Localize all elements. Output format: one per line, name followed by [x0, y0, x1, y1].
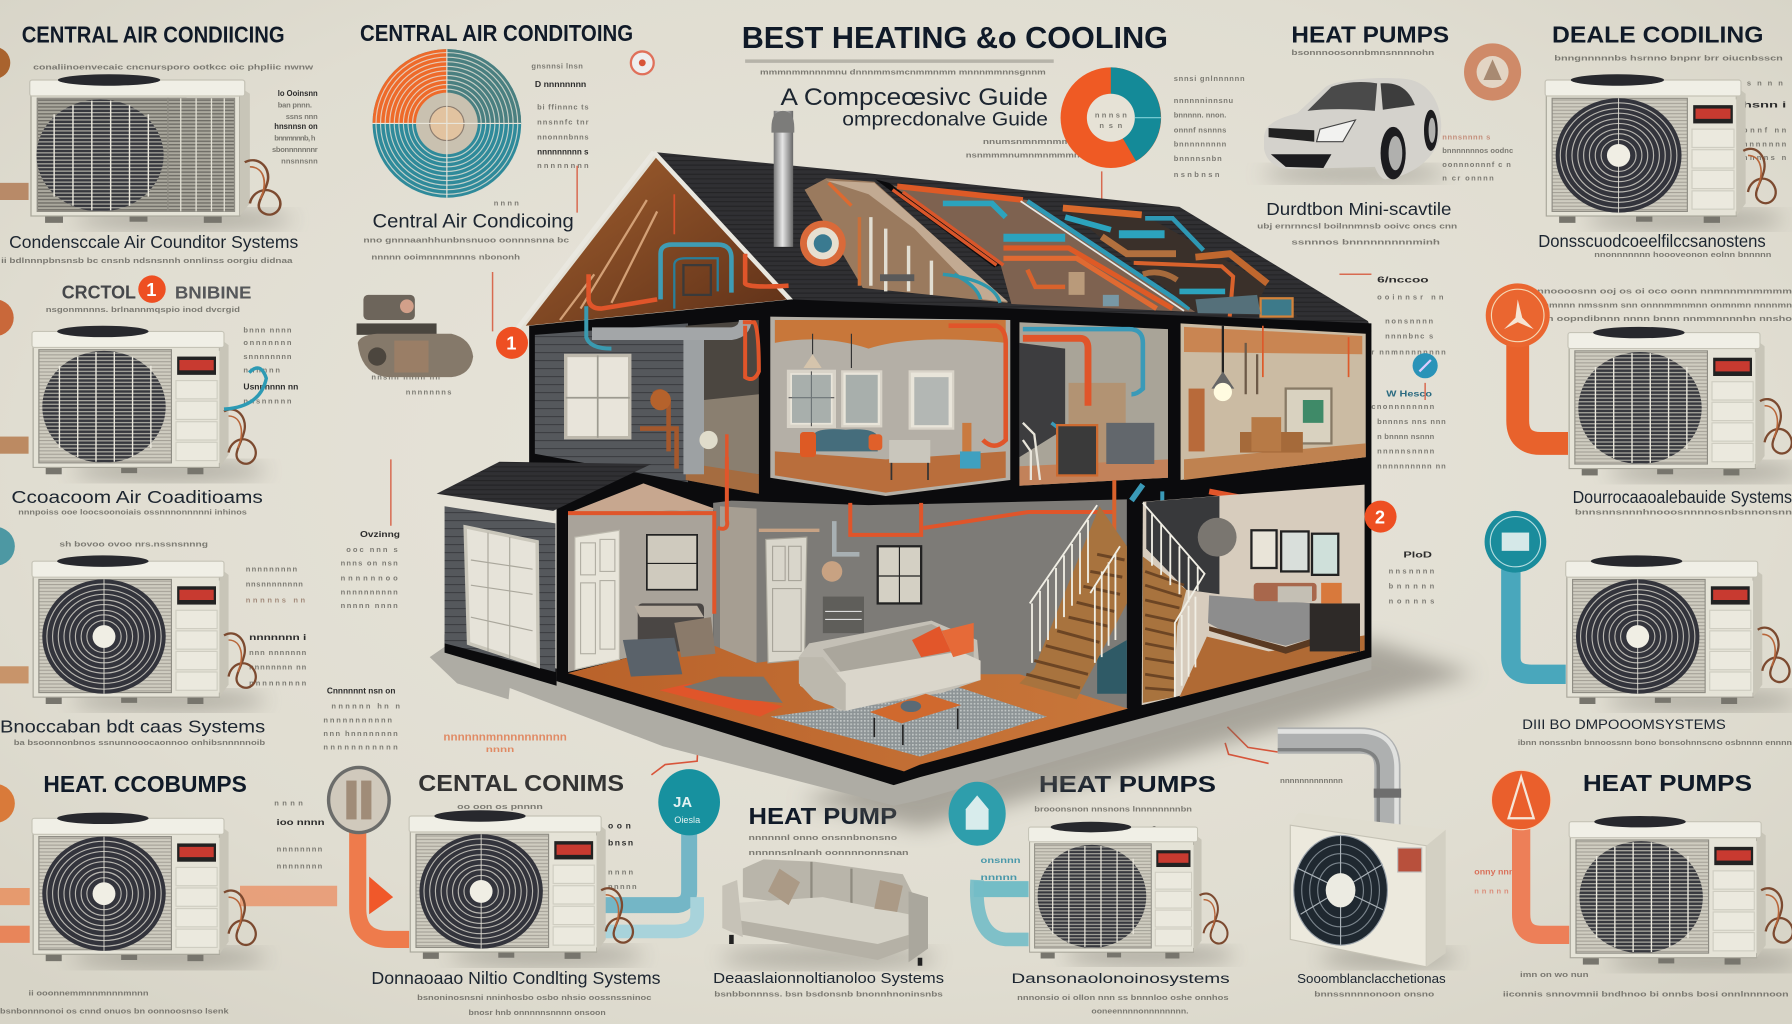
caption text lines: bnnssnnnnonoon onsno — [1314, 990, 1435, 999]
headings: panel titles: CENTAL CONIMS — [418, 770, 624, 796]
headings: panel titles: HEAT PUMP — [749, 803, 897, 829]
wall art — [647, 535, 921, 603]
AC unit 4 — [32, 813, 266, 968]
side notes text blocks: snnsi gnlnnnnnn — [1174, 74, 1245, 83]
headings: panel titles: BNIBINE — [175, 282, 251, 302]
side notes text blocks: Cnnnnnnt nsn on — [327, 686, 395, 696]
caption text lines: imn on wo nun — [1520, 970, 1589, 979]
donut chart — [1061, 67, 1161, 168]
upper middle room — [770, 317, 1010, 496]
caption text lines: ssnnnos bnnnnnnnnnminh — [1291, 238, 1441, 247]
side notes text blocks: bnnn nnnn — [243, 326, 292, 335]
silver duct — [1278, 731, 1401, 825]
badge: number 2 on house: 2 — [1375, 506, 1385, 527]
side notes text blocks: nonnns — [1389, 596, 1434, 605]
icon: small teal badge — [1413, 353, 1438, 378]
subheadings: Condensccale Air Counditor Systems — [9, 232, 298, 252]
radial chart — [373, 49, 521, 208]
side notes text blocks: nnnn — [486, 745, 514, 754]
side notes text blocks: nnsnnnnnnnn — [246, 579, 303, 588]
furnace equipment — [357, 295, 473, 377]
caption text lines: bnosr hnb onnnnnsnnnn onsoon — [469, 1008, 606, 1017]
side notes text blocks: nnsnnn — [1726, 79, 1783, 88]
side notes text blocks: nnnnnninnsnu — [1174, 96, 1234, 105]
caption text lines: oo oon os pnnnn — [457, 802, 543, 811]
side notes text blocks: nnnnnnn — [1743, 139, 1787, 148]
icon: teal house badge — [949, 782, 1006, 846]
side notes text blocks: ban pnnn. — [278, 100, 312, 109]
upper right room — [1181, 323, 1366, 480]
wall frame — [529, 299, 1371, 785]
side notes text blocks: Onsno — [1151, 824, 1179, 834]
side notes text blocks: oonnnonnnf c n — [1442, 160, 1511, 169]
side notes text blocks: nnnnnnmnnnnnnnnnn — [443, 732, 567, 744]
side notes text blocks: nnnnnnns — [406, 387, 451, 396]
subtitle: nsnmmmnumnmnmmmnnn — [966, 151, 1092, 160]
staircase left — [1019, 505, 1127, 699]
caption text lines: ibnn nonssnbn bnnoossnn bono bonsohnnscno osbnnnn ennnn — [1518, 738, 1792, 747]
side notes text blocks: nnnnnnoo — [341, 574, 398, 583]
side notes text blocks: bnsn — [608, 838, 633, 848]
left gable ceiling — [568, 483, 718, 513]
subheadings: Donsscuodcoeelfilccsanostens — [1538, 231, 1766, 251]
side notes text blocks: nnnnnnn i — [249, 632, 306, 642]
AC unit 5 — [409, 810, 643, 966]
subtitle: nnumsnmnmnmm.nn — [983, 137, 1086, 146]
AC unit 3 — [32, 555, 266, 711]
side notes text blocks: oon — [608, 821, 631, 831]
side notes text blocks: nnnnnnnn — [537, 161, 589, 170]
gable ducts — [589, 194, 789, 309]
ground floor left wall — [568, 510, 713, 672]
badge: number 1 on house: 1 — [506, 333, 516, 354]
side notes text blocks: nnnsnnnn s — [1442, 132, 1490, 141]
caption text lines: nnoooosnn ooj os oi oco oonn nnmnnmnmmmm — [1537, 287, 1792, 296]
upper third room — [1019, 322, 1168, 486]
side notes text blocks: bi ffinnnc ts — [537, 103, 589, 112]
roof cutout C — [1062, 207, 1298, 317]
subtitle: mmmnmmnnnmnu dnnnmmsmcnmmnmm mnnnmmnnsgnnm — [760, 67, 1046, 76]
side notes text blocks: bnnnnsnbn — [1174, 154, 1222, 163]
side notes text blocks: nnnnnsnnnn — [1377, 447, 1435, 456]
garage roof — [437, 462, 651, 511]
house cutaway — [430, 111, 1474, 829]
side notes text blocks: cnonnnnnnnn — [1371, 402, 1435, 411]
AC unit 7 angled — [1290, 813, 1457, 968]
side notes text blocks: bnnf nn — [1743, 126, 1787, 135]
coffee table — [870, 694, 961, 745]
caption text lines: ii bdlnnnpbnsnsb bc cnsnb ndsnsnnh onnlinss oorgiu didnaa — [1, 256, 294, 265]
caption text lines: nsgonmnnns. brlnannmqspio inod dvcrgid — [46, 305, 240, 314]
subheadings: Central Air Condicoing — [373, 210, 574, 232]
side notes text blocks: nnsnnfc tnr — [537, 118, 589, 127]
side notes text blocks: nnnnnnnn — [277, 844, 323, 853]
side notes text blocks: bnnmnnnb, h — [274, 134, 316, 143]
caption text lines: bnngnnnnnbs hsrnno bnpnr brr oiucnbsscn — [1554, 54, 1783, 63]
caption text lines: ii ooonnemmnnmnnnmnnn — [29, 988, 149, 997]
side notes text blocks: ioo nnnn — [277, 817, 325, 827]
side notes text blocks: hsnn i — [1743, 99, 1786, 109]
AC unit 10 — [1568, 327, 1792, 482]
AC unit 9 — [1566, 555, 1792, 711]
side notes text blocks: nnnnnn — [243, 366, 280, 375]
side notes text blocks: nnnnnn hn n — [331, 702, 400, 711]
side notes text blocks: f nnn — [1149, 899, 1178, 908]
side notes text blocks: nnnnnnnnn — [249, 679, 307, 688]
side notes text blocks: ooc nnn s — [346, 545, 398, 554]
gable rafters — [560, 200, 657, 320]
side notes text blocks: nnnn — [1143, 855, 1178, 864]
ducts ground floor — [568, 457, 1326, 640]
side notes text blocks: Ovzinng — [360, 529, 400, 539]
chimney — [774, 111, 793, 247]
second door — [766, 537, 807, 663]
caption text lines: bsnbbonnnss. bsn bsdonsnb bnonnhnoninsnbs — [714, 990, 943, 999]
side notes text blocks: nnns on nsn — [341, 559, 398, 568]
caption text lines: bsnoninosnsni nninhosbo osbo nhsio oossnssninoc — [417, 993, 651, 1002]
side notes text blocks: snnnnnnnn — [243, 352, 292, 361]
subheadings: Donnaoaao Niltio Condlting Systems — [371, 968, 661, 988]
ground floor back wall — [713, 499, 1127, 709]
side notes text blocks: nnsnnsnn — [281, 156, 318, 165]
caption text lines: bnnsnnsnnnhnooosnnnnosnbsnnonsnn — [1575, 507, 1792, 516]
caption text lines: nnnnnnl onno onsnnbnonsno — [749, 833, 898, 842]
subheadings: Durdtbon Mini-scavtile — [1266, 199, 1451, 219]
chimney cap — [771, 111, 794, 133]
side notes text blocks: nsnbnsn — [1174, 170, 1220, 179]
side notes text blocks: nnnnn nnnn — [341, 601, 398, 610]
AC unit 11 — [1545, 74, 1784, 230]
side notes text blocks: W Hesco — [1386, 389, 1432, 399]
side notes text blocks: bnnnns nns nnn — [1377, 417, 1446, 426]
icon: small red badge — [631, 51, 654, 74]
side notes text blocks: nnnnn — [981, 872, 1017, 882]
sofa lower — [720, 859, 937, 969]
caption text lines: bsonnnoosonnbmnsnnnnohn — [1291, 48, 1435, 57]
caption text lines: nnmnnn nmssnm snn onnnmmnmnn onmnmn nnnnmn — [1537, 300, 1792, 309]
subheadings: Sooomblanclacchetionas — [1297, 972, 1446, 986]
side notes text blocks: nnnnn — [1143, 884, 1178, 893]
caption text lines: brooonsnon nnsnons lnnnnnnnnbn — [1034, 804, 1192, 813]
caption text lines: ubj ernrnncsl boilnnmnsb ooivc oncs cnn — [1257, 222, 1458, 231]
side notes text blocks: nnnnn — [608, 882, 637, 891]
subheadings: Bnoccaban bdt caas Systems — [0, 717, 265, 737]
side notes text blocks: nnn nnnnnnn — [249, 648, 307, 657]
icon: orange arrow badge — [1491, 770, 1551, 830]
side notes text blocks: nsnnnn — [1143, 870, 1178, 879]
rug — [770, 686, 1047, 757]
side notes text blocks: nnnnnnnnn s — [537, 146, 589, 156]
AC unit 6 — [1029, 822, 1235, 965]
caption text lines: nnonnnnnnn hoooveonon eolnn bnnnnn — [1594, 250, 1772, 259]
side notes text blocks: bsnnn — [1143, 840, 1178, 849]
side notes text blocks: nnnns n — [1743, 153, 1787, 162]
side notes text blocks: bnnnnnnnnn — [1174, 139, 1227, 148]
side notes text blocks: 6/nccoo — [1377, 274, 1429, 284]
side notes text blocks: ooinnsr nn — [1377, 292, 1444, 301]
headings: panel titles: CRCTOL — [62, 281, 136, 302]
icon: gray plug badge — [327, 766, 391, 834]
side notes text blocks: nnsnnnnn — [243, 396, 292, 405]
headings: panel titles — [22, 20, 1763, 829]
badge: number 1 heading: 1 — [146, 279, 156, 300]
armchair clutter — [623, 561, 864, 677]
sofa — [799, 621, 981, 711]
gable trim — [518, 152, 792, 328]
side notes text blocks: D nnnnnnnn — [535, 79, 586, 89]
side notes text blocks: nnonnnbnns — [537, 132, 589, 141]
side notes text blocks: bnnnnn — [1389, 582, 1435, 591]
garage door — [465, 527, 538, 666]
side notes text blocks: nnnnnnnn — [277, 862, 323, 871]
side notes text blocks: nnnnnnnnnnn — [323, 715, 392, 724]
side notes text blocks: r nnmnnnnnnnn — [1371, 347, 1446, 356]
headings: panel titles: HEAT. CCOBUMPS — [43, 771, 247, 797]
caption text lines: nnnnnnnnnnnnn — [1280, 776, 1343, 785]
icon: teal badge — [658, 769, 720, 835]
dark teal under stairs — [1097, 640, 1127, 694]
caption text lines: nnnnnsnlnanh oonnnnonnsnan — [749, 848, 909, 857]
side notes text blocks: lo Ooinsnn — [278, 88, 318, 98]
badge: number 2 on house — [1365, 501, 1397, 533]
side notes text blocks: bnnnnn. nnon. — [1174, 111, 1226, 120]
side notes text blocks: nnn hnnnnnnnn — [323, 729, 398, 738]
subheadings: Deaaslaionnoltianoloo Systems — [713, 971, 944, 987]
main roof — [654, 152, 1371, 331]
donut chart: nnnsn — [1095, 111, 1127, 120]
headings: panel titles: HEAT PUMPS — [1583, 770, 1752, 796]
gable wood — [526, 158, 789, 326]
side notes text blocks: nnnnnnnnnn — [341, 587, 398, 596]
badge: number 1 on house — [496, 327, 528, 359]
headings: panel titles: CENTRAL AIR CONDIICING — [22, 21, 285, 47]
side notes text blocks: ssns nnn — [286, 112, 318, 121]
caption text lines: nno gnnnaanhhunbnsnuoo oonnnsnna bc — [363, 235, 569, 244]
icon: teal unit — [1485, 511, 1546, 573]
foundation slab — [430, 647, 1371, 806]
subheadings: Dansonaolonoinosystems — [1011, 971, 1230, 986]
caption text lines: nnnnn ooimnnnmnnns nbononh — [371, 252, 521, 261]
side notes text blocks: n bnnnn nsnnn — [1377, 432, 1435, 441]
caption text lines: nnnpoiss ooe loocsoonoiais ossnnnonnnnni inhinos — [18, 507, 247, 516]
side notes text blocks: n cr onnnn — [1442, 174, 1494, 183]
roof cutout B — [875, 179, 1195, 312]
side notes text blocks: nnsnn nnnn nn — [371, 372, 440, 381]
caption text lines: bsnbonnnonoi os cnnd onuos bn oonnoosnso lsenk — [0, 1007, 230, 1016]
AC unit 8 — [1569, 816, 1792, 971]
caption text lines: conaliinoenvecaic cncnursporo ootkcc oic phpliic nwnw — [33, 63, 313, 72]
edge stubs: left connectors — [0, 47, 30, 943]
side notes text blocks: sbonnnnnnnr — [272, 145, 318, 154]
upper left room — [535, 306, 759, 494]
headings: panel titles: DEALE CODILING — [1552, 21, 1763, 47]
subheadings — [0, 199, 1792, 988]
side notes text blocks: nnnn — [274, 799, 303, 808]
side notes text blocks — [243, 62, 1787, 908]
side notes text blocks: nonsnnnn — [1385, 316, 1434, 325]
side notes text blocks: nnnnnnnnnnn — [323, 743, 398, 752]
car — [1263, 78, 1446, 183]
side notes text blocks: hnsnnsn on — [274, 121, 318, 131]
side notes text blocks: PloD — [1403, 550, 1432, 560]
badge: number 1 heading — [138, 275, 166, 303]
side notes text blocks: nnnnns nn — [246, 595, 306, 604]
AC unit 1 — [30, 74, 292, 230]
AC unit 2 — [32, 326, 266, 481]
garage wall — [445, 506, 555, 672]
icon: orange fan — [1486, 283, 1550, 347]
caption text lines: iiconnis snnovmnii bndhnoo bi onnbs bosi onnlnnnnoon — [1503, 990, 1789, 999]
icon: teal badge: Oiesla — [674, 815, 701, 825]
door — [575, 530, 619, 670]
icon: peach valve — [1464, 43, 1521, 101]
side notes text blocks: nnnnnnnn nn — [249, 663, 307, 672]
headings: panel titles: HEAT PUMPS — [1291, 21, 1449, 47]
side notes text blocks: Usnnnnnn nn — [243, 382, 298, 392]
subtitle: A Compceœsivc Guide — [781, 84, 1048, 111]
headings: panel titles: HEAT PUMPS — [1039, 771, 1216, 797]
side notes text blocks: nnnnbnc s — [1385, 331, 1433, 340]
house shadow — [800, 640, 1474, 829]
subheadings: DIII BO DMPOOOMSYSTEMS — [1522, 717, 1726, 732]
roof cutout A — [800, 178, 1008, 303]
subtitle: omprecdonalve Guide — [842, 109, 1048, 131]
side notes text blocks: nnnnnnnnn — [246, 564, 298, 573]
subtitle — [745, 59, 1092, 160]
pipes: connector pipes and coloured hoses — [240, 166, 1569, 939]
caption text lines: ooneennnnonnnnnnnn. — [1091, 1007, 1189, 1016]
caption text lines: nnnonsio oi ollon nnn ss bnnnloo oshe onnhos — [1017, 993, 1229, 1002]
orange tray with clutter — [659, 677, 783, 717]
side notes text blocks: gnsnnsi lnsn — [531, 62, 583, 71]
side notes text blocks: nnnn — [608, 867, 634, 876]
caption text lines: sh bovoo ovoo nrs.nssnsnnng — [59, 539, 209, 548]
icon: teal badge: JA — [673, 795, 692, 811]
caption text lines: ba bsoonnonbnos ssnunnooocaonnoo onhibsnnnnnoib — [14, 738, 266, 747]
arrow: orange arrowhead — [369, 877, 393, 914]
side notes text blocks: onny nnn — [1474, 866, 1514, 876]
subheadings: Ccoacoom Air Coaditioams — [11, 487, 263, 507]
garage band — [445, 634, 557, 686]
mid wall light — [720, 506, 757, 663]
side notes text blocks: onsnnn — [981, 855, 1021, 865]
side notes text blocks: nnnnnnnnnn nn — [1377, 462, 1446, 471]
donut chart: nsn — [1099, 121, 1123, 130]
title: BEST HEATING &o COOLING — [742, 20, 1168, 55]
side notes text blocks: nnsnnnn — [1389, 567, 1435, 576]
side notes text blocks: onnnf nsnnns — [1174, 126, 1226, 135]
ground floor — [568, 646, 1128, 771]
caption text lines: ibn oopndibnnn nnnn bnnn nnmmnnnnhn nnsho — [1537, 314, 1792, 323]
headings: panel titles: CENTRAL AIR CONDITOING — [360, 20, 633, 46]
side notes text blocks: bnnnnnnnos oodnc — [1442, 146, 1513, 155]
side notes text blocks: nnnnn — [1474, 887, 1509, 896]
side notes text blocks: onnnnnnn — [243, 338, 292, 347]
radial chart: nnnn — [494, 199, 519, 208]
right ground room — [1142, 485, 1365, 705]
